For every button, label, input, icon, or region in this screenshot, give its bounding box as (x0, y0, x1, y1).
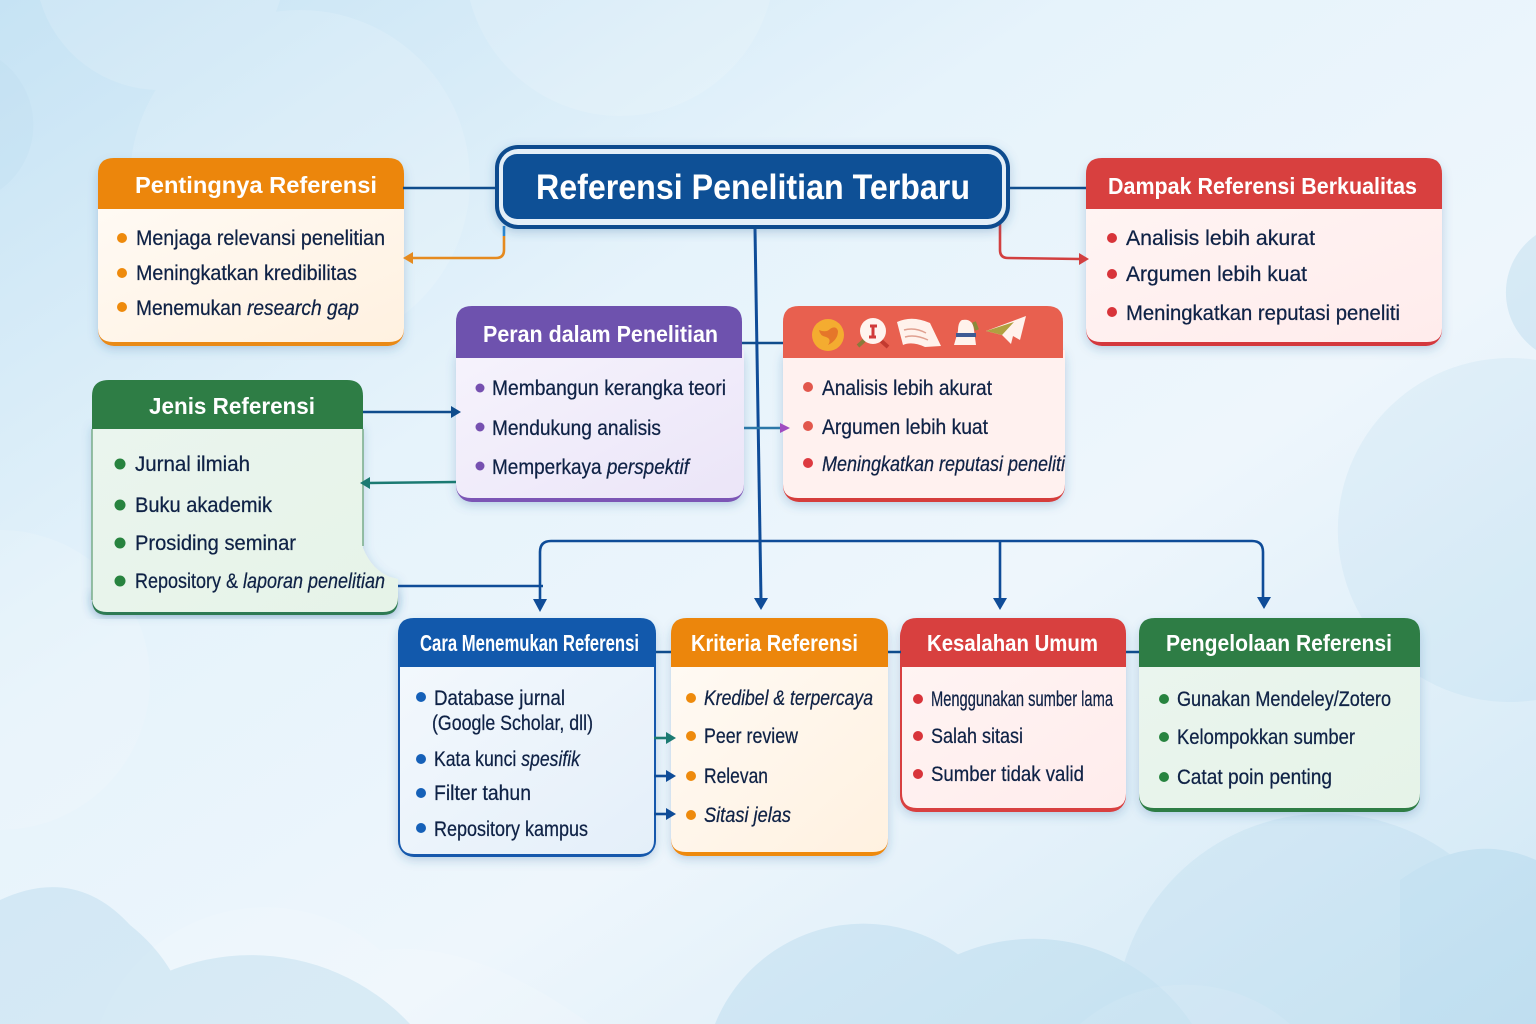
bullet list: Prosiding seminar (135, 532, 296, 555)
arrow: title to Pentingnya (403, 226, 504, 264)
bullet list: Sitasi jelas (704, 804, 791, 827)
heading: Dampak Referensi Berkualitas (1108, 173, 1417, 199)
icon: orange circle (812, 319, 844, 351)
heading: Jenis Referensi (149, 393, 315, 419)
bullet list: Peer review (704, 725, 799, 748)
icon: open book (897, 319, 941, 347)
bullet list: Menemukan research gap (136, 297, 359, 320)
heading: Pentingnya Referensi (135, 172, 377, 198)
title box (495, 145, 1010, 229)
bullet list (686, 687, 873, 827)
bullet list: Analisis lebih akurat (822, 377, 992, 400)
panel: Pengelolaan Referensi (1139, 618, 1420, 812)
bullet list: Kata kunci spesifik (434, 748, 581, 771)
bullet list (913, 688, 1113, 786)
bullet list: Database jurnal (434, 687, 565, 710)
bullet list: Memperkaya perspektif (492, 456, 691, 479)
arrow: title to Dampak (1000, 222, 1089, 265)
arrow: Peran to Jenis (360, 477, 456, 489)
panel: icon header effects (783, 306, 1066, 502)
heading: Cara Menemukan Referensi (420, 630, 639, 656)
bullet list: Kelompokkan sumber (1177, 726, 1355, 749)
bullet list: Argumen lebih kuat (1126, 263, 1307, 286)
bullet list: Meningkatkan kredibilitas (136, 262, 357, 285)
bullet list: Sumber tidak valid (931, 763, 1084, 786)
arrows: Cara to Kriteria (654, 732, 676, 820)
bullet list: (Google Scholar, dll) (432, 712, 593, 735)
bullet list (114, 453, 385, 593)
title: Referensi Penelitian Terbaru (536, 168, 970, 207)
bullet list: Catat poin penting (1177, 766, 1332, 789)
bullet list: Relevan (704, 765, 768, 788)
panel: Peran dalam Penelitian (456, 306, 744, 502)
bullet list: Membangun kerangka teori (492, 377, 726, 400)
bullet list: Kredibel & terpercaya (704, 687, 873, 710)
bullet list: Menggunakan sumber lama (931, 688, 1113, 711)
bullet list (803, 377, 1066, 476)
bullet list: Argumen lebih kuat (822, 416, 988, 439)
arrow: Jenis to Peran (363, 406, 461, 418)
bullet list: Jurnal ilmiah (135, 453, 250, 476)
arrow: Jenis to Cara (398, 585, 543, 587)
bullet list: Gunakan Mendeley/Zotero (1177, 688, 1391, 711)
bullet list (416, 687, 593, 841)
panel: Dampak Referensi Berkualitas (1086, 158, 1442, 346)
panel: Kesalahan Umum (900, 618, 1126, 812)
bullet list: Menjaga relevansi penelitian (136, 227, 385, 250)
bullet list: Repository kampus (434, 818, 588, 841)
bullet list: Buku akademik (135, 494, 272, 517)
panel: Jenis Referensi (92, 380, 398, 615)
connectors (360, 188, 1271, 820)
bullet list (476, 377, 726, 479)
heading: Peran dalam Penelitian (483, 321, 718, 347)
bullet list: Filter tahun (434, 782, 531, 805)
bullet list: Meningkatkan reputasi peneliti (822, 453, 1066, 476)
bullet list: Repository & laporan penelitian (135, 570, 385, 593)
panel: Cara Menemukan Referensi (398, 618, 656, 857)
arrow: bus to lower panels (533, 541, 1271, 612)
bullet list (1107, 227, 1400, 325)
icon: bell (954, 320, 977, 345)
panel: Pentingnya Referensi (98, 158, 404, 346)
icon: paper plane (986, 316, 1026, 344)
bullet list: Mendukung analisis (492, 417, 661, 440)
bullet list: Salah sitasi (931, 725, 1023, 748)
icon: magnifier (858, 318, 888, 347)
heading: Kriteria Referensi (691, 630, 858, 656)
heading: Kesalahan Umum (927, 630, 1098, 656)
arrow: central trunk to Kriteria (754, 229, 768, 610)
bullet list: Analisis lebih akurat (1126, 227, 1315, 250)
panel: Kriteria Referensi (671, 618, 888, 856)
bullet list (1159, 688, 1391, 789)
bullet list: Meningkatkan reputasi peneliti (1126, 302, 1400, 325)
bullet list (117, 227, 385, 320)
arrow: Peran to effects panel (744, 423, 790, 433)
heading: Pengelolaan Referensi (1166, 630, 1392, 656)
